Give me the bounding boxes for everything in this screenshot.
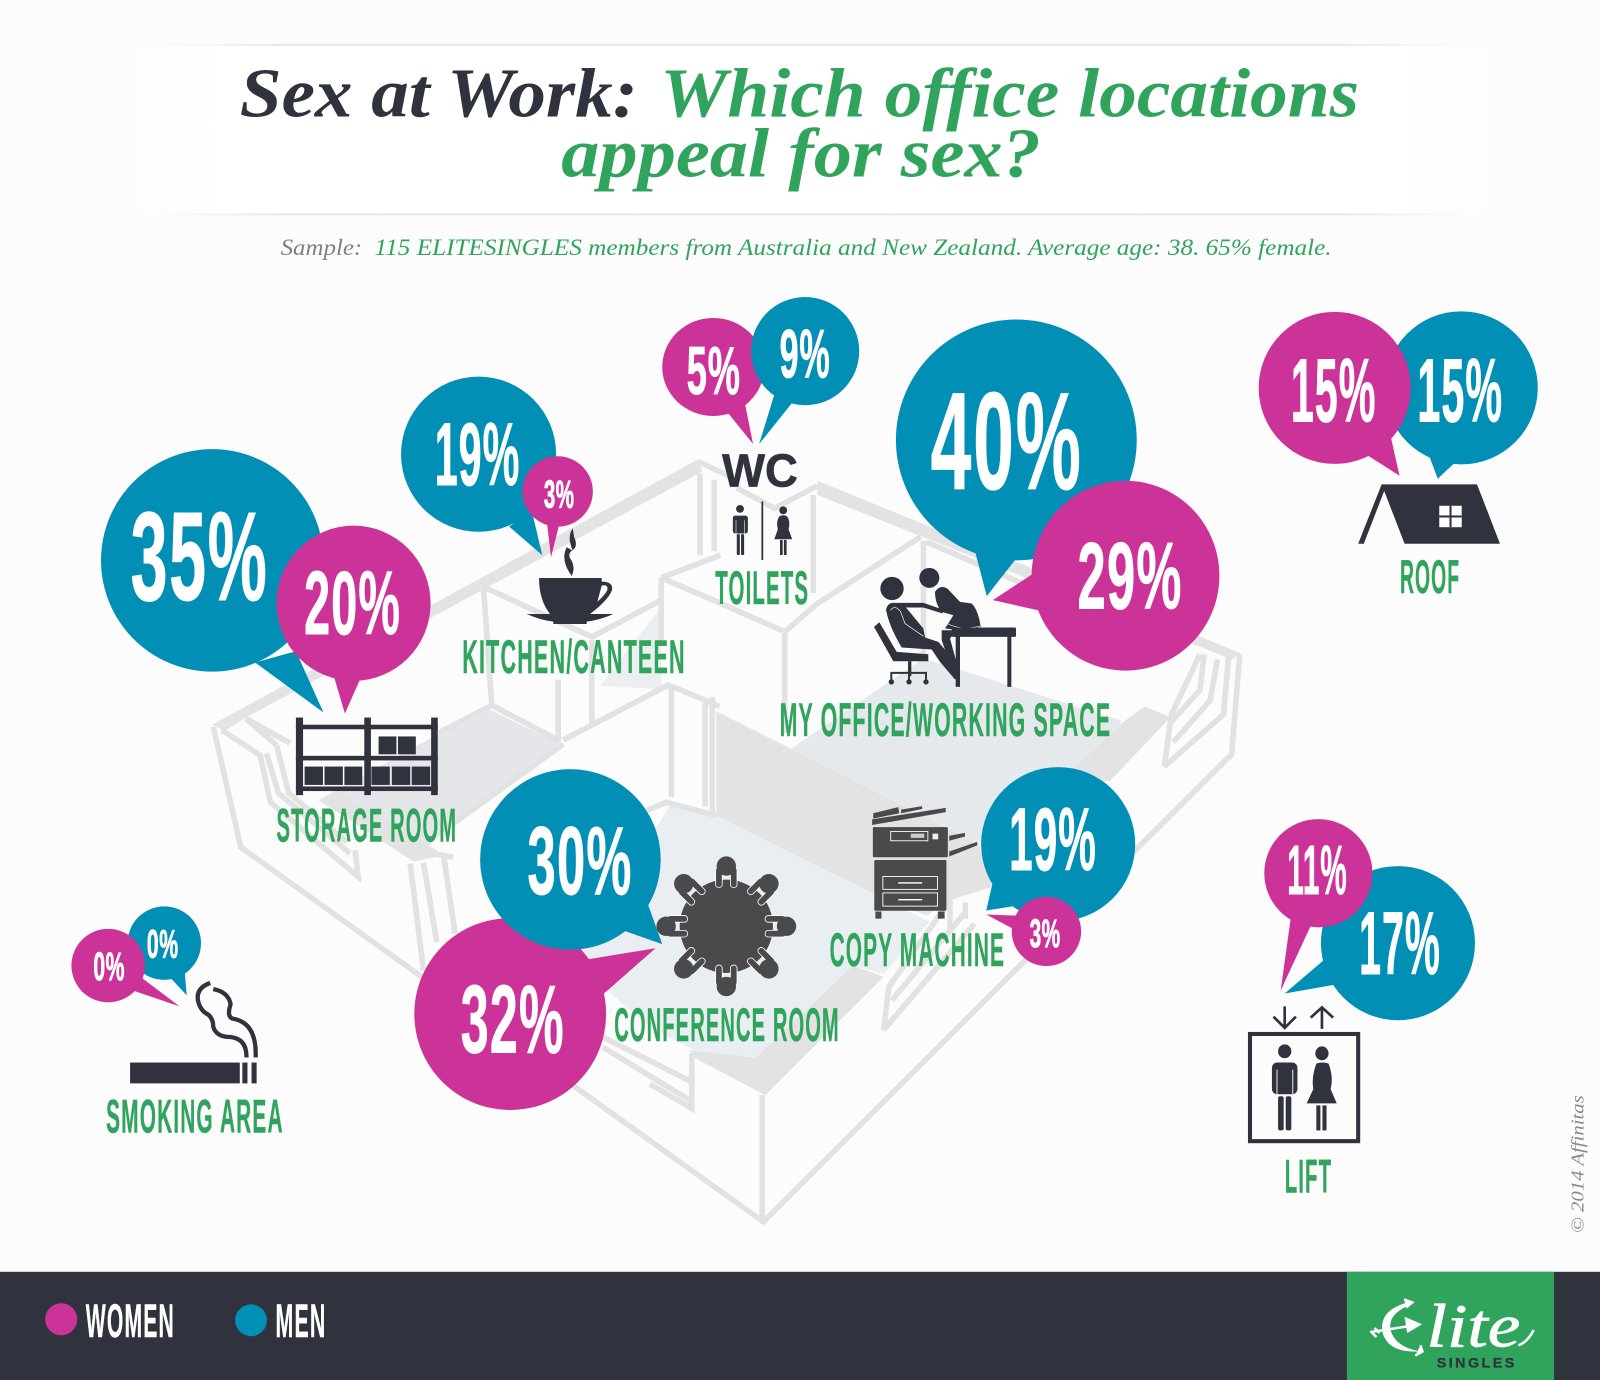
bubble: men 15%: 15% (1417, 342, 1503, 442)
copy machine (830, 767, 1135, 976)
icon: WC sign: WC (722, 444, 798, 496)
bubble: men 30% (480, 769, 662, 950)
interior wall block (716, 711, 992, 916)
bubble: men 17% (1285, 866, 1475, 1020)
bubble: women 0% (71, 929, 180, 1006)
bubble: women 29%: 29% (1078, 523, 1183, 629)
bubble: women 20% (277, 526, 431, 713)
bubble: women 5%: 5% (687, 334, 741, 409)
icon: roof (1358, 484, 1500, 544)
bubble: women 32%: 32% (461, 964, 565, 1073)
text: CONFERENCE ROOM (614, 999, 840, 1051)
legend: women (45, 1295, 175, 1347)
icon: cigarette (130, 983, 257, 1083)
my office/working space: MY OFFICE/WORKING SPACE (780, 694, 1111, 746)
bubble: men 40%: 40% (931, 364, 1083, 519)
bubble: women 11%: 11% (1287, 831, 1347, 909)
bubble: men 19% (401, 377, 556, 555)
text: STORAGE ROOM (277, 800, 457, 852)
legend: men (235, 1295, 327, 1347)
footer bar: WOMEN (86, 1295, 175, 1347)
roof: ROOF (1400, 551, 1460, 603)
bubble: men 19%: 19% (1009, 790, 1097, 889)
smoking area (71, 906, 284, 1142)
bubble: men 0% (128, 906, 201, 995)
bubble: women 20%: 20% (304, 554, 401, 654)
logo: lite (1427, 1292, 1520, 1360)
title: appeal for sex? (561, 116, 1041, 193)
bubble: men 17%: 17% (1359, 894, 1441, 993)
front wall block (690, 966, 884, 1095)
icon: couple at desk (874, 568, 1016, 687)
rear left wall band (212, 459, 702, 731)
footer bar (0, 1272, 1600, 1380)
toilets (662, 297, 859, 614)
bubble: women 15% (1259, 312, 1411, 476)
bubble: women 11% (1264, 819, 1372, 991)
bubble: women 5% (662, 318, 764, 444)
floor plan illustration (212, 459, 1241, 1222)
storage lower wall block (319, 791, 445, 861)
floor: storage room (318, 709, 563, 859)
divider (761, 501, 763, 560)
bubble: men 35% (101, 449, 323, 712)
bubble: men 35%: 35% (131, 485, 268, 627)
icon: shelves (296, 718, 438, 795)
bubble: men 19%: 19% (435, 405, 520, 504)
bubble: women 15%: 15% (1291, 342, 1377, 442)
storage room (101, 449, 457, 852)
floor: conference room (571, 803, 930, 1057)
icon: copier (872, 806, 977, 919)
floor: office (716, 658, 1121, 843)
bubble: men 9%: 9% (780, 317, 831, 393)
text: SMOKING AREA (106, 1090, 284, 1142)
bubble: women 0%: 0% (93, 945, 125, 989)
wall outlines (213, 461, 1240, 1222)
bubble: men 30%: 30% (528, 806, 633, 915)
floor: kitchen (600, 607, 661, 689)
logo: SINGLES (1437, 1356, 1514, 1372)
sample note: Sample: (281, 235, 362, 261)
footer bar: MEN (276, 1295, 327, 1347)
bubble: women 3%: 3% (544, 473, 574, 516)
rear right wall band (817, 481, 1241, 659)
icon: WC sign (722, 444, 798, 560)
bubble: women 29% (993, 481, 1219, 671)
copy machine: COPY MACHINE (830, 924, 1005, 976)
man figure (733, 505, 748, 555)
logo (1347, 1272, 1554, 1380)
bubble: women 3% (522, 456, 593, 557)
bubble: men 0%: 0% (147, 922, 179, 966)
sample note: 115 ELITESINGLES members from Australia and New Zealand. Average age: 38. 65% female. (374, 235, 1332, 261)
woman figure (774, 506, 792, 555)
kitchen/canteen (401, 377, 686, 683)
icon: conference table (656, 856, 796, 996)
bubble: women 3% (986, 897, 1081, 966)
lift (1250, 819, 1475, 1203)
icon: lift (1250, 1006, 1358, 1141)
conference room (414, 769, 840, 1110)
copyright: © 2014 Affinitas (1568, 1095, 1588, 1233)
right wall block (1051, 706, 1168, 806)
title: Sex at Work: (240, 55, 638, 132)
bubble: men 15% (1385, 311, 1538, 479)
my office/working space (780, 319, 1219, 746)
title: Which office locations (660, 55, 1359, 132)
roof (1259, 311, 1538, 603)
bubble: men 9% (751, 297, 859, 444)
title band (112, 44, 1510, 215)
bubble: men 19% (981, 767, 1135, 921)
text: KITCHEN/CANTEEN (462, 631, 686, 683)
toilets: TOILETS (715, 562, 809, 614)
title (240, 55, 1359, 193)
bubble: men 40% (896, 319, 1137, 596)
bubble: women 32% (414, 918, 656, 1110)
bubble: women 3%: 3% (1030, 912, 1061, 956)
lift: LIFT (1285, 1151, 1332, 1203)
icon: coffee cup (527, 528, 613, 624)
